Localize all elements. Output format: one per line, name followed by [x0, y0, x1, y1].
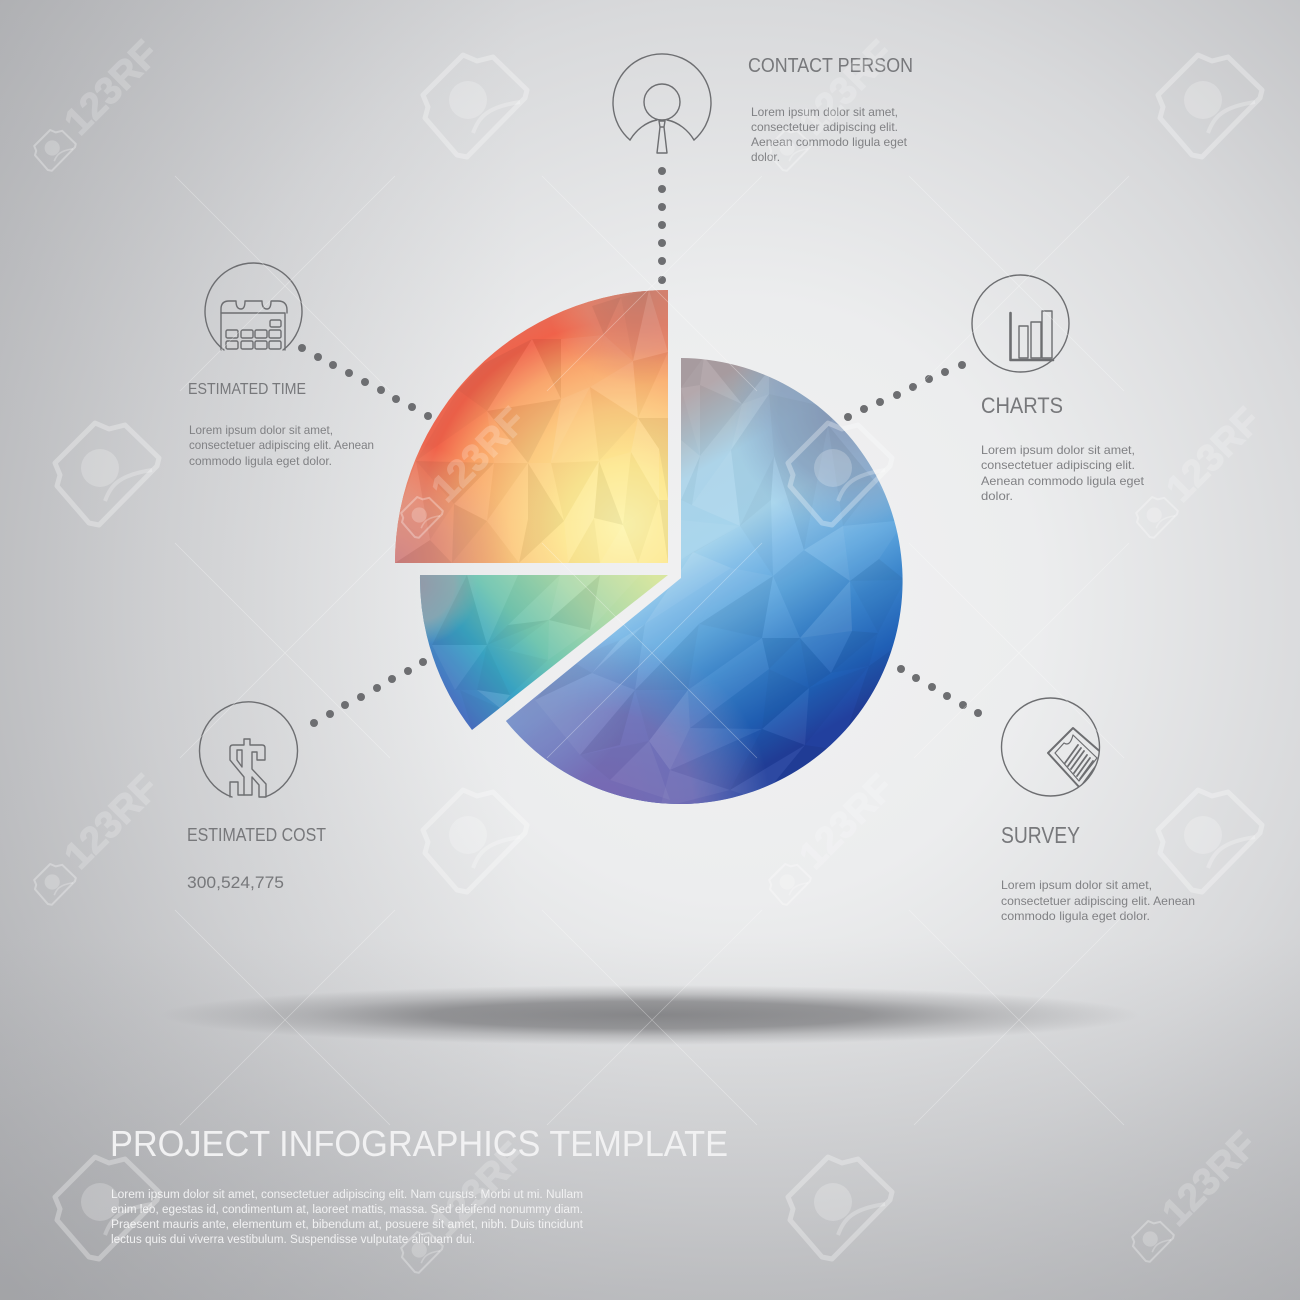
description text: [111, 1189, 584, 1246]
dotted connector: charts: [844, 361, 966, 421]
contact person text: Lorem ipsum dolor sit amet,: [751, 105, 898, 119]
pie chart: [390, 285, 910, 810]
survey text: SURVEY: [1001, 822, 1080, 848]
estimated cost text: [187, 825, 326, 892]
watermark layer: 123RF: [424, 1135, 534, 1245]
survey text: consectetuer adipiscing elit. Aenean: [1001, 894, 1195, 908]
dotted connector: estimated time: [298, 344, 432, 420]
contact person text: CONTACT PERSON: [748, 55, 913, 77]
description text: Lorem ipsum dolor sit amet, consectetuer adipiscing elit. Nam cursus. Morbi ut mi. Nullam: [111, 1189, 583, 1201]
title: PROJECT INFOGRAPHICS TEMPLATE: [110, 1123, 728, 1164]
estimated time text: Lorem ipsum dolor sit amet,: [189, 423, 333, 437]
watermark layer: 123RF: [792, 767, 902, 877]
watermark layer: 123RF: [792, 33, 902, 143]
contact person text: Aenean commodo ligula eget: [751, 135, 908, 149]
watermark layer: 123RF: [1159, 400, 1269, 510]
pie slice: green: [420, 575, 668, 730]
contact person text: dolor.: [751, 150, 780, 164]
icon: calendar: [205, 263, 302, 350]
charts text: Aenean commodo ligula eget: [981, 474, 1145, 488]
charts text: consectetuer adipiscing elit.: [981, 458, 1135, 472]
description text: Praesent mauris ante, elementum et, bibendum at, posuere sit amet, nibh. Duis tincidunt: [111, 1219, 584, 1231]
survey text: Lorem ipsum dolor sit amet,: [1001, 878, 1152, 892]
dotted connector: contact person: [658, 167, 666, 284]
charts text: CHARTS: [981, 393, 1063, 418]
icon: bar chart: [972, 275, 1069, 372]
survey text: commodo ligula eget dolor.: [1001, 909, 1150, 923]
estimated cost text: 300,524,775: [187, 873, 284, 892]
floating shadow: [160, 985, 1140, 1045]
watermark layer: 123RF: [57, 33, 167, 143]
watermark layer: 123RF: [1155, 1124, 1265, 1234]
watermark layer: 123RF: [424, 400, 534, 510]
charts text: dolor.: [981, 489, 1013, 503]
estimated time text: consectetuer adipiscing elit. Aenean: [189, 438, 374, 452]
estimated time text: [188, 381, 374, 468]
description text: lectus quis dui viverra vestibulum. Suspendisse vulputate aliquam dui.: [111, 1234, 475, 1246]
dotted connector: survey: [897, 665, 982, 717]
description text: enim leo, egestas id, condimentum at, laoreet mattis, massa. Sed eleifend nonummy diam.: [111, 1204, 583, 1216]
survey text: [1001, 822, 1195, 923]
estimated time text: commodo ligula eget dolor.: [189, 454, 332, 468]
dotted connector: estimated cost: [310, 658, 427, 727]
pie slice: blue: [495, 350, 910, 810]
contact person text: [748, 55, 913, 164]
charts text: Lorem ipsum dolor sit amet,: [981, 443, 1135, 457]
icon: dollar: [199, 702, 297, 797]
charts text: [981, 393, 1145, 503]
contact person text: consectetuer adipiscing elit.: [751, 120, 898, 134]
estimated cost text: ESTIMATED COST: [187, 825, 326, 845]
icon: survey document: [1002, 698, 1104, 796]
watermark layer: 123RF: [57, 767, 167, 877]
icon: contact person: [613, 54, 711, 153]
pie slice: orange quarter: [390, 285, 675, 570]
estimated time text: ESTIMATED TIME: [188, 381, 306, 398]
